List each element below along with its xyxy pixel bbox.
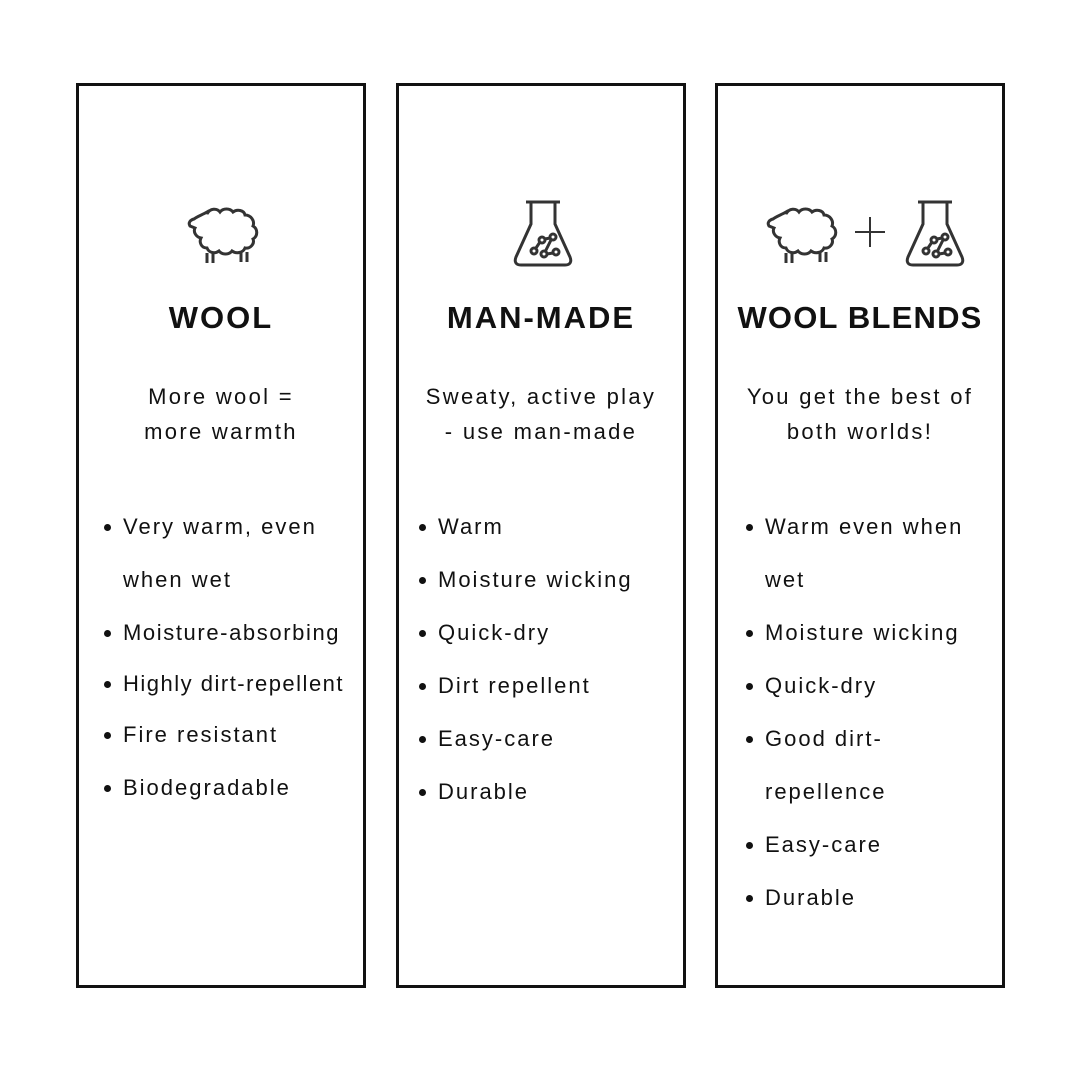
panel: wool blends [715,83,1005,988]
subtitle: You get the best of [747,384,973,409]
subtitle [144,384,298,444]
subtitle: - use man-made [445,419,637,444]
list: man-made properties: Easy-care [438,726,555,751]
list: wool blend properties: repellence [765,779,887,804]
list: wool blend properties: Warm even when [765,514,963,539]
list: wool blend properties [746,514,963,910]
panel: man-made [396,83,686,988]
heading: man-made: MAN-MADE [447,300,635,335]
list: wool blend properties: Moisture wicking [765,620,960,645]
icon: sheep plus flask [766,200,964,266]
icon: sheep [188,208,258,263]
subtitle: both worlds! [787,419,933,444]
heading: wool: WOOL [169,300,273,335]
list: wool properties: Moisture-absorbing [123,620,340,645]
list: man-made properties [419,514,633,804]
list: wool blend properties: wet [765,567,805,592]
list: wool blend properties: Easy-care [765,832,882,857]
list: wool properties [104,514,344,800]
subtitle: More wool = [148,384,294,409]
subtitle [747,384,973,444]
subtitle: more warmth [144,419,298,444]
list: man-made properties: Moisture wicking [438,567,633,592]
list: wool properties: Highly dirt-repellent [123,671,344,696]
subtitle [426,384,656,444]
icon: flask [514,200,572,266]
list: man-made properties: Dirt repellent [438,673,591,698]
list: wool blend properties: Durable [765,885,856,910]
list: wool properties: Very warm, even [123,514,317,539]
heading: wool blends: WOOL BLENDS [737,300,983,335]
list: man-made properties: Quick-dry [438,620,550,645]
list: wool blend properties: Quick-dry [765,673,877,698]
list: wool properties: Biodegradable [123,775,291,800]
list: wool properties: Fire resistant [123,722,278,747]
list: man-made properties: Durable [438,779,529,804]
list: wool blend properties: Good dirt- [765,726,883,751]
subtitle: Sweaty, active play [426,384,656,409]
panel: wool [76,83,366,988]
list: man-made properties: Warm [438,514,504,539]
list: wool properties: when wet [123,567,232,592]
